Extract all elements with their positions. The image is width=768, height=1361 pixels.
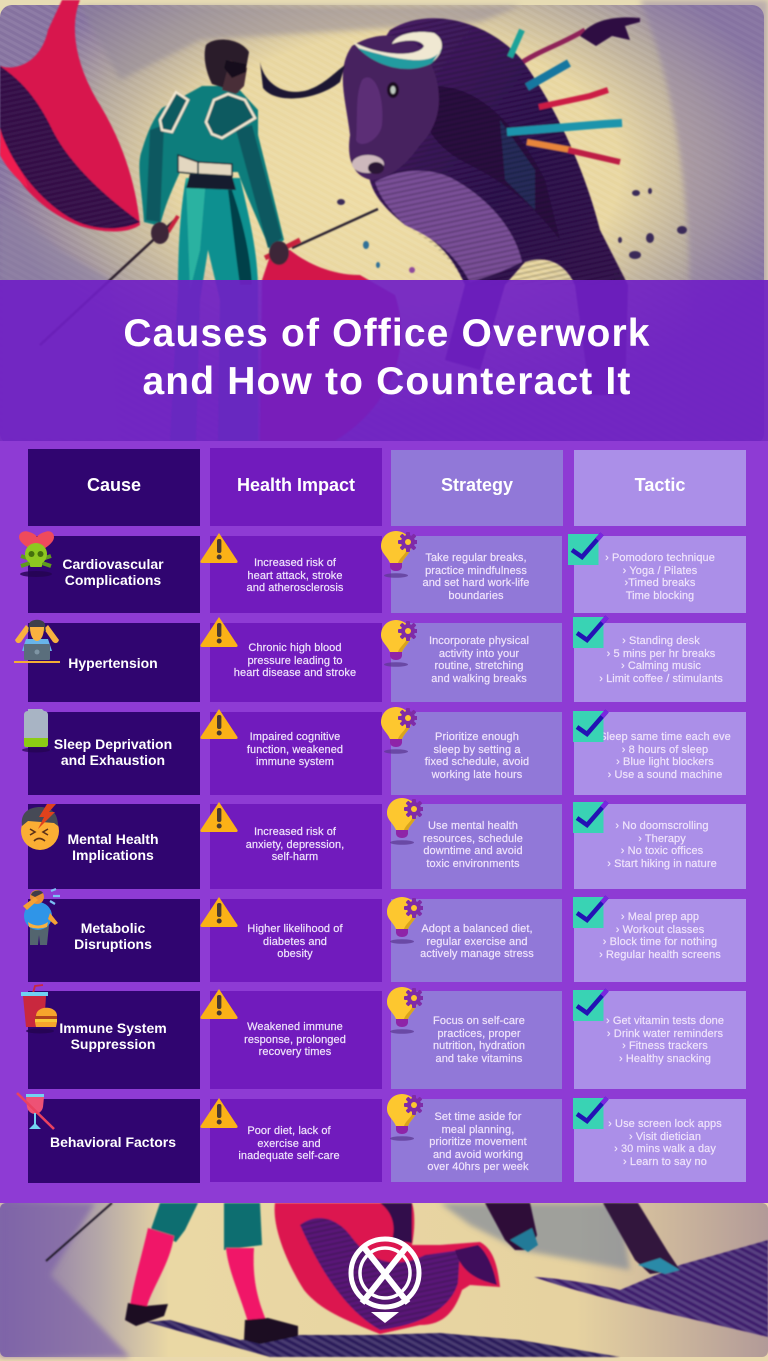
strategy text 4 — [423, 820, 523, 870]
row 2 tactic cell — [574, 623, 746, 702]
sand shading — [0, 0, 768, 441]
strategy text 1: and set hard work-life — [423, 577, 529, 589]
title: Causes of Office Overwork — [123, 312, 651, 355]
health impact text 1: and atherosclerosis — [247, 582, 343, 594]
tactic text 4: › Start hiking in nature — [607, 858, 717, 870]
health impact text 5: diabetes and — [263, 936, 327, 948]
tactic text 7: › Visit dietician — [629, 1131, 701, 1143]
icon: check 3 — [573, 709, 609, 742]
tactic text 5 — [599, 911, 721, 961]
tactic text 7 — [608, 1118, 722, 1168]
strategy text 3 — [424, 731, 529, 781]
icon: soda and burger — [21, 984, 57, 1034]
tactic text 3: › 8 hours of sleep — [622, 744, 708, 756]
cause: behavioral factors: Behavioral Factors — [50, 1134, 176, 1150]
cause: immune system: Immune System — [59, 1020, 167, 1036]
icon: bulb 2 — [381, 620, 417, 667]
illustration: matador facing bull — [0, 0, 768, 441]
health impact text 1: heart attack, stroke — [247, 570, 343, 582]
header: strategy — [391, 450, 563, 526]
health impact text 2: pressure leading to — [247, 655, 343, 667]
strategy text 1: practice mindfulness — [425, 565, 527, 577]
tactic text 1: › Yoga / Pilates — [623, 565, 697, 577]
row 3 tactic cell — [574, 712, 746, 795]
cause: sleep deprivation: and Exhaustion — [61, 752, 165, 768]
health impact text 2 — [234, 642, 356, 679]
small cape — [260, 250, 401, 441]
bull body — [345, 18, 628, 395]
row 1 health cell — [210, 536, 382, 613]
red cape — [275, 1203, 500, 1334]
sword left — [40, 217, 178, 345]
matador waist — [178, 155, 232, 176]
tactic text 1: › Pomodoro technique — [605, 552, 715, 564]
strategy text 6: nutrition, hydration — [433, 1040, 525, 1052]
strategy text 1 — [422, 552, 529, 602]
icon: bulb 1 — [381, 531, 417, 578]
health impact text 3: Impaired cognitive — [250, 731, 340, 743]
health impact text 2: Chronic high blood — [248, 642, 342, 654]
health impact text 5 — [247, 923, 343, 960]
row 7 tactic cell — [574, 1099, 746, 1182]
header: cause — [28, 449, 200, 526]
bull tail — [518, 30, 585, 65]
strategy text 7: prioritize movement — [429, 1136, 527, 1148]
row 7 health cell — [210, 1099, 382, 1182]
strategy text 5: Adopt a balanced diet, — [421, 923, 533, 935]
matador legs — [125, 1203, 298, 1344]
icon: warning 7 — [200, 1097, 238, 1128]
bull hooves — [485, 1203, 680, 1274]
icon: check 6 — [573, 988, 609, 1021]
row 4 tactic cell — [574, 804, 746, 889]
tactic text 2: › Limit coffee / stimulants — [599, 673, 723, 685]
tactic text 5: › Workout classes — [616, 924, 704, 936]
tactic text 3 — [599, 731, 731, 781]
tactic text 4 — [607, 820, 717, 870]
strategy text 6: and take vitamins — [436, 1053, 522, 1065]
title band — [0, 280, 768, 441]
hands — [151, 222, 169, 244]
header: tactic — [574, 450, 746, 526]
health impact text 1: Increased risk of — [254, 557, 336, 569]
tactic text 5: › Meal prep app — [621, 911, 699, 923]
tactic text 1: Time blocking — [626, 590, 694, 602]
cause: cardiovascular complications: Cardiovascular — [62, 556, 164, 572]
icon: stressed person at laptop — [14, 620, 60, 663]
strategy text 7: over 40hrs per week — [427, 1161, 529, 1173]
strategy text 4: downtime and avoid — [423, 845, 523, 857]
strategy text 7: and avoid working — [433, 1149, 523, 1161]
row 4 strategy cell — [391, 804, 562, 889]
red cape — [0, 0, 140, 232]
header: tactic: Tactic — [635, 475, 685, 495]
sword right — [292, 209, 378, 248]
icon: bulb 5 — [387, 897, 423, 944]
header: cause: Cause — [87, 475, 141, 495]
icon: low battery — [22, 709, 50, 752]
strategy text 7: meal planning, — [442, 1124, 514, 1136]
tactic text 5: › Regular health screens — [599, 949, 721, 961]
tactic text 4: › No toxic offices — [621, 845, 703, 857]
health impact text 5: obesity — [277, 948, 313, 960]
health impact text 7: Poor diet, lack of — [247, 1125, 331, 1137]
floor shadows — [147, 1240, 768, 1357]
banderillas — [510, 30, 522, 57]
title — [123, 312, 651, 403]
icon: bulb 6 — [387, 987, 423, 1034]
strategy text 2: and walking breaks — [431, 673, 527, 685]
dust splatter — [337, 188, 687, 273]
row 5 health cell — [210, 899, 382, 982]
icon: crossed out wine glass — [16, 1092, 55, 1130]
icon: heart and skull — [19, 531, 54, 577]
health impact text 4 — [246, 826, 344, 863]
tactic text 3: › Blue light blockers — [616, 756, 714, 768]
matador jacket — [139, 86, 284, 250]
cause: mental health: Mental Health — [67, 831, 158, 847]
cause: metabolic disruptions: Metabolic — [81, 920, 145, 936]
health impact text 5: Higher likelihood of — [247, 923, 343, 935]
health impact text 6: recovery times — [259, 1046, 331, 1058]
strategy text 6: practices, proper — [437, 1028, 521, 1040]
icon: check 7 — [573, 1096, 609, 1129]
matador legs — [170, 178, 258, 441]
icon: warning 6 — [200, 988, 238, 1019]
strategy text 2 — [429, 635, 529, 685]
row 5 strategy cell — [391, 899, 562, 982]
tactic text 3: › Use a sound machine — [608, 769, 722, 781]
strategy text 4: toxic environments — [426, 858, 520, 870]
tactic text 6: › Drink water reminders — [607, 1028, 723, 1040]
health impact text 6 — [244, 1021, 346, 1058]
strategy text 7 — [427, 1111, 529, 1173]
row 6 tactic cell — [574, 991, 746, 1089]
cause: hypertension: Hypertension — [68, 655, 158, 671]
tactic text 6 — [606, 1015, 724, 1065]
cause: mental health — [67, 831, 158, 863]
strategy text 2: activity into your — [439, 648, 519, 660]
strategy text 1: boundaries — [448, 590, 504, 602]
cause: sleep deprivation — [54, 736, 172, 768]
cause: metabolic disruptions: Disruptions — [74, 936, 152, 952]
health impact text 4: self-harm — [272, 851, 318, 863]
header: health impact: Health Impact — [237, 475, 355, 495]
strategy text 2: routine, stretching — [435, 660, 523, 672]
matador head — [205, 40, 249, 93]
health impact text 2: heart disease and stroke — [234, 667, 356, 679]
strategy text 5: actively manage stress — [420, 948, 534, 960]
row 1 cause cell — [28, 536, 200, 613]
title: and How to Counteract It — [142, 360, 632, 403]
strategy text 3: Prioritize enough — [435, 731, 519, 743]
strategy text 3: fixed schedule, avoid — [425, 756, 529, 768]
tactic text 6: › Fitness trackers — [622, 1040, 708, 1052]
row 1 tactic cell — [574, 536, 746, 613]
tactic text 2: › Standing desk — [622, 635, 700, 647]
icon: stressed face with lightning bolt — [21, 804, 59, 850]
tactic text 3: Sleep same time each eve — [599, 731, 731, 743]
row 2 health cell — [210, 623, 382, 702]
row 3 strategy cell — [391, 712, 562, 795]
strategy text 4: Use mental health — [428, 820, 518, 832]
row 5 tactic cell — [574, 899, 746, 982]
row 7 strategy cell — [391, 1099, 562, 1182]
sword tip — [46, 1203, 112, 1261]
strategy text 6 — [433, 1015, 525, 1065]
icon: check 2 — [573, 615, 609, 648]
row 1 strategy cell — [391, 536, 562, 613]
bull horns — [260, 62, 345, 98]
cause: metabolic disruptions — [74, 920, 152, 952]
health impact text 1 — [246, 557, 344, 594]
health impact text 6: Weakened immune — [247, 1021, 343, 1033]
tactic text 7: › 30 mins walk a day — [614, 1143, 716, 1155]
strategy text 1: Take regular breaks, — [425, 552, 527, 564]
cause: immune system — [59, 1020, 167, 1052]
tactic text 1 — [605, 552, 715, 602]
illustration: feet, cape and hooves — [0, 1203, 768, 1361]
tactic text 7: › Learn to say no — [623, 1156, 707, 1168]
logo — [351, 1239, 419, 1323]
strategy text 4: resources, schedule — [423, 833, 523, 845]
cause: immune system: Suppression — [71, 1036, 155, 1052]
bull head — [343, 35, 439, 180]
row 4 health cell — [210, 804, 382, 889]
health impact text 6: response, prolonged — [244, 1034, 346, 1046]
icon: warning 5 — [200, 896, 238, 927]
icon: bulb 7 — [387, 1094, 423, 1141]
tactic text 2: › 5 mins per hr breaks — [607, 648, 715, 660]
row 5 cause cell — [28, 899, 200, 982]
icon: warning 1 — [200, 533, 238, 563]
cause: sleep deprivation: Sleep Deprivation — [54, 736, 172, 752]
tactic text 6: › Healthy snacking — [619, 1053, 711, 1065]
header: health impact — [210, 448, 382, 526]
icon: check 1 — [568, 532, 604, 565]
tactic text 2 — [599, 635, 723, 685]
strategy text 3: working late hours — [432, 769, 522, 781]
row 3 cause cell — [28, 712, 200, 795]
row 2 cause cell — [28, 623, 200, 702]
row 2 strategy cell — [391, 623, 562, 702]
tactic text 2: › Calming music — [621, 660, 701, 672]
health impact text 3: immune system — [256, 756, 334, 768]
tactic text 7: › Use screen lock apps — [608, 1118, 722, 1130]
health impact text 7: inadequate self-care — [238, 1150, 340, 1162]
cause: cardiovascular complications — [62, 556, 164, 588]
strategy text 6: Focus on self-care — [433, 1015, 525, 1027]
health impact text 7: exercise and — [257, 1138, 321, 1150]
cause: mental health: Implications — [72, 847, 154, 863]
row 6 strategy cell — [391, 991, 562, 1089]
icon: bulb 3 — [381, 707, 417, 754]
row 6 cause cell — [28, 991, 200, 1089]
icon: overweight person — [23, 888, 60, 945]
tactic text 1: ›Timed breaks — [625, 577, 695, 589]
health impact text 3: function, weakened — [247, 744, 343, 756]
icon: check 4 — [573, 800, 609, 833]
header: strategy: Strategy — [441, 475, 513, 495]
row 7 cause cell — [28, 1099, 200, 1183]
row 6 health cell — [210, 991, 382, 1089]
cause: cardiovascular complications: Complications — [65, 572, 161, 588]
tactic text 6: › Get vitamin tests done — [606, 1015, 724, 1027]
strategy text 2: Incorporate physical — [429, 635, 529, 647]
strategy text 5: regular exercise and — [426, 936, 528, 948]
strategy text 3: sleep by setting a — [433, 744, 521, 756]
health impact text 3 — [246, 731, 343, 768]
icon: warning 3 — [200, 709, 238, 739]
icon: warning 2 — [200, 617, 238, 647]
tactic text 5: › Block time for nothing — [603, 936, 717, 948]
health impact text 4: anxiety, depression, — [246, 839, 344, 851]
strategy text 7: Set time aside for — [434, 1111, 522, 1123]
tactic text 4: › Therapy — [638, 833, 686, 845]
row 4 cause cell — [28, 804, 200, 889]
tactic text 4: › No doomscrolling — [615, 820, 709, 832]
icon: check 5 — [573, 895, 609, 928]
health impact text 7 — [238, 1125, 340, 1162]
table panel — [0, 441, 768, 1203]
row 3 health cell — [210, 712, 382, 795]
health impact text 4: Increased risk of — [254, 826, 336, 838]
strategy text 5 — [420, 923, 534, 960]
icon: bulb 4 — [387, 798, 423, 845]
icon: warning 4 — [200, 802, 238, 832]
